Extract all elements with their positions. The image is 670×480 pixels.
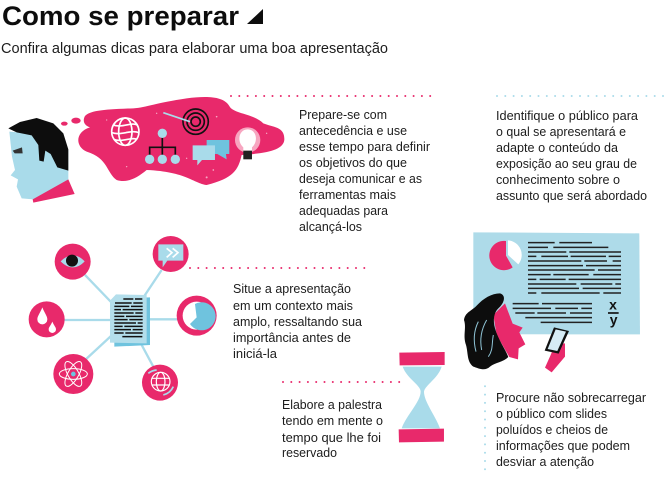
node: globe — [142, 365, 178, 401]
subtitle: Confira algumas dicas para elaborar uma boa apresentação — [1, 40, 388, 57]
text: block 4: tendo em mente o — [282, 413, 383, 428]
text: block 3: importância antes de — [233, 330, 351, 345]
text: block 5: poluídos e cheios de — [496, 422, 608, 437]
slide pie chart — [489, 240, 522, 270]
phone — [545, 327, 569, 354]
text: block 4: Elabore a palestra — [282, 397, 383, 412]
node: eye — [55, 244, 91, 280]
face — [9, 132, 68, 199]
text: block 5: desviar a atenção — [496, 454, 594, 469]
cloud — [78, 97, 284, 185]
text: block 2: assunto que será abordado — [496, 188, 647, 203]
document — [110, 294, 150, 347]
text: block 1: esse tempo para definir — [299, 139, 431, 154]
text: block 1: adequadas para — [299, 203, 389, 218]
hair — [8, 118, 68, 171]
eye — [13, 147, 23, 153]
text: block 2: o qual se apresentará e — [496, 124, 626, 139]
text: block 4: tempo que lhe foi — [282, 430, 381, 445]
text: block 1: Prepare-se com — [299, 107, 387, 122]
illustration: woman with slide — [464, 232, 640, 382]
text: block 3: iniciá-la — [233, 346, 278, 361]
text: block 2: exposição ao seu grau de — [496, 156, 637, 171]
text: block 5: o público com slides — [496, 406, 607, 421]
text: block 2: adapte o conteúdo da — [496, 140, 619, 155]
hair strands — [474, 320, 493, 357]
text: block 2 — [496, 108, 647, 203]
text: block 1: os objetivos do que — [299, 155, 407, 170]
title: Como se preparar — [2, 1, 239, 31]
icon: speech bubbles — [193, 140, 229, 165]
face — [493, 303, 525, 359]
text: block 1: ferramentas mais — [299, 187, 396, 202]
text: block 5: Procure não sobrecarregar — [496, 390, 647, 405]
text: block 5: informações que podem — [496, 438, 630, 453]
formula x over y: x — [609, 297, 617, 313]
icon: light bulb — [235, 127, 260, 159]
formula x over y — [608, 297, 619, 327]
slide — [473, 232, 640, 334]
text: block 5 — [496, 390, 647, 469]
text: block 1: antecedência e use — [299, 123, 407, 138]
illustration: hourglass — [399, 352, 445, 442]
hair — [464, 293, 508, 369]
node: atom — [53, 354, 93, 394]
bottom cap — [399, 429, 444, 442]
text: block 3: amplo, ressaltando sua — [233, 314, 363, 329]
sand glass — [402, 367, 442, 428]
text: block 1: alcançá-los — [299, 219, 362, 234]
node: pie chart — [177, 296, 217, 336]
text: block 2: conhecimento sobre o — [496, 172, 620, 187]
text: block 3 — [233, 281, 363, 361]
icon: org chart — [145, 129, 180, 164]
thought bubbles — [61, 118, 81, 126]
node: drops — [29, 301, 65, 337]
white cutout below slide — [473, 334, 567, 382]
top cap — [399, 352, 445, 365]
illustration: head with thought cloud — [8, 97, 284, 203]
text: block 1 — [299, 107, 431, 234]
icon: arrow to target — [163, 113, 190, 122]
text: block 2: Identifique o público para — [496, 108, 639, 123]
formula x over y: y — [610, 311, 618, 327]
text: block 1: deseja comunicar e as — [299, 171, 422, 186]
icon: target — [183, 109, 208, 134]
hand — [545, 343, 565, 372]
diagram: document network — [29, 236, 217, 401]
node: speech bubble — [153, 236, 189, 272]
text: block 3: Situe a apresentação — [233, 281, 351, 296]
text: block 4 — [282, 397, 383, 460]
connectors — [47, 270, 197, 367]
text: block 3: em um contexto mais — [233, 298, 353, 313]
neck collar — [33, 179, 75, 203]
text: block 4: reservado — [282, 445, 337, 460]
slide text lines — [513, 243, 621, 322]
icon: globe — [112, 118, 139, 145]
cloud speckles — [106, 113, 267, 178]
